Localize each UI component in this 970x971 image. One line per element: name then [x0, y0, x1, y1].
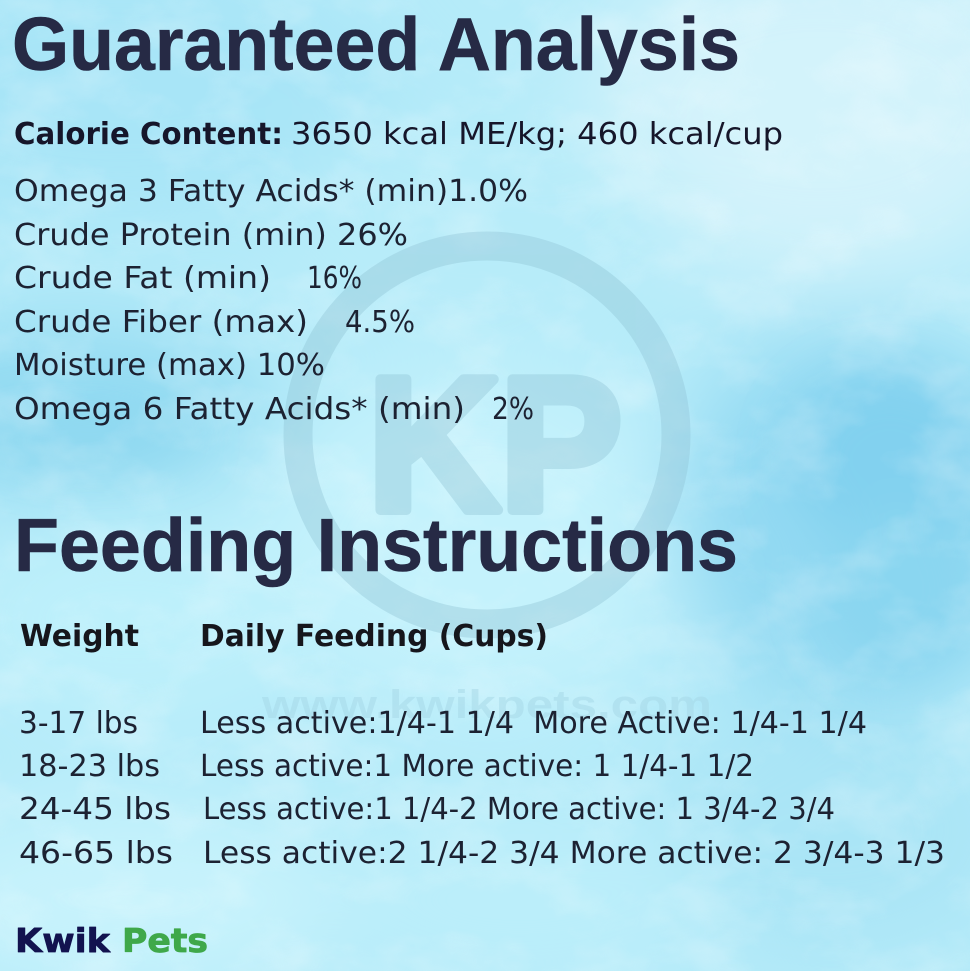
nutrient analysis list: [14, 174, 534, 427]
row: 46-65 lbs: Less active:2 1/4-2 3/4 More active: 2 3/4-3 1/3: [203, 836, 945, 871]
row: 24-45 lbs: 24-45 lbs: [19, 792, 171, 827]
nutrient analysis list: Crude Protein (min) 26%: [14, 218, 408, 253]
nutrient analysis list: Crude Fat (min): [14, 261, 271, 296]
nutrient analysis list: 2%: [492, 392, 534, 427]
calorie content: 3650 kcal ME/kg; 460 kcal/cup: [291, 117, 783, 152]
watermark: KP logo: KP: [368, 339, 622, 551]
row: 3-17 lbs: 3-17 lbs: [19, 706, 138, 741]
feeding table header: [20, 619, 548, 654]
nutrient analysis list: Crude Fiber (max): [14, 305, 308, 340]
logo: Kwik Pets: [15, 921, 208, 960]
watermark: KP logo: [298, 246, 676, 624]
row: 18-23 lbs: Less active:1 More active: 1 1/4-1 1/2: [200, 749, 754, 784]
watermark: website: www.kwikpets.com: [261, 683, 712, 727]
feeding table header: Weight: [20, 619, 139, 654]
nutrient analysis list: Moisture (max) 10%: [14, 348, 325, 383]
calorie content: [14, 117, 783, 152]
row: 46-65 lbs: 46-65 lbs: [19, 836, 173, 871]
title: Feeding Instructions: Feeding Instructions: [14, 503, 738, 587]
nutrient analysis list: 4.5%: [345, 305, 415, 340]
nutrient analysis list: 16%: [307, 261, 362, 296]
feeding table rows: [19, 706, 945, 871]
nutrient analysis list: Omega 6 Fatty Acids* (min): [14, 392, 465, 427]
row: 18-23 lbs: 18-23 lbs: [19, 749, 160, 784]
calorie content: Calorie Content:: [14, 117, 283, 152]
row: 3-17 lbs: Less active:1/4-1 1/4 More Active: 1/4-1 1/4: [200, 706, 867, 741]
row: 24-45 lbs: Less active:1 1/4-2 More active: 1 3/4-2 3/4: [203, 792, 835, 827]
feeding table header: Daily Feeding (Cups): [200, 619, 548, 654]
logo: Kwik Pets: Kwik: [15, 921, 111, 960]
nutrient analysis list: Omega 3 Fatty Acids* (min)1.0%: [14, 174, 528, 209]
title: Guaranteed Analysis: Guaranteed Analysis: [12, 2, 740, 86]
logo: Kwik Pets: Pets: [122, 921, 208, 960]
